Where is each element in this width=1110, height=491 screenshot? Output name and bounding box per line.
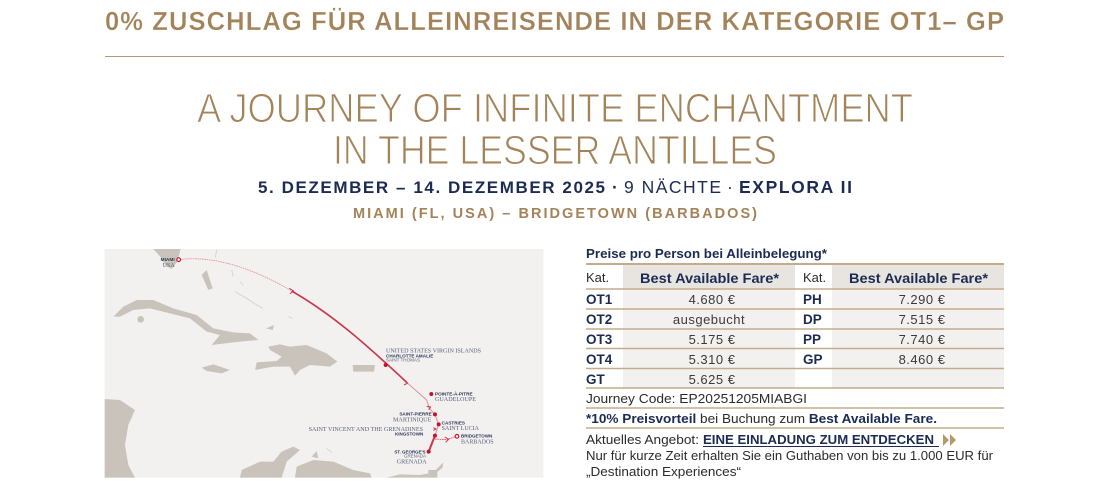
current offer: EINE EINLADUNG ZUM ENTDECKEN (703, 432, 934, 447)
table backgrounds (623, 265, 1004, 388)
map panel (105, 249, 543, 478)
fare rows: DP (803, 312, 822, 327)
map labels: BRIDGETOWN (461, 434, 492, 439)
fare rows: ausgebucht (673, 312, 745, 327)
port markers (177, 258, 459, 454)
fare rows (586, 292, 946, 387)
map labels: USA (163, 263, 175, 269)
table header row: Kat. (803, 270, 826, 285)
subtitle: dates, nights and ship: 5. DEZEMBER – 14. DEZEMBER 2025 (258, 178, 605, 197)
fare rows: GT (586, 372, 606, 387)
table header row (586, 270, 989, 286)
title (197, 85, 913, 173)
table header row: Kat. (586, 270, 609, 285)
current offer: „Destination Experiences“ (586, 464, 741, 479)
fare rows: 7.740 € (899, 332, 946, 347)
current offer: Nur für kurze Zeit erhalten Sie ein Guthaben von bis zu 1.000 EUR für (586, 448, 994, 463)
table header row: Best Available Fare* (640, 271, 780, 286)
fare rows: 5.625 € (689, 372, 736, 387)
fare rows: PH (803, 292, 822, 307)
fare rows: 8.460 € (899, 352, 946, 367)
fare rows: 7.515 € (899, 312, 946, 327)
map labels: GRENADA (404, 453, 426, 458)
table header row: Best Available Fare* (849, 271, 989, 286)
route line: Miami to Bridgetown: MIAMI (FL, USA) – BRIDGETOWN (BARBADOS) (353, 206, 757, 222)
map labels: POINTE-À-PITRE (435, 391, 473, 396)
map labels: BARBADOS (461, 439, 494, 445)
map labels: MIAMI (161, 257, 175, 262)
map labels: SAINT THOMAS (386, 358, 420, 363)
fare rows: OT2 (586, 312, 612, 327)
price table panel (586, 246, 1004, 479)
fare rows: GP (803, 352, 823, 367)
subtitle: dates, nights and ship (258, 177, 852, 197)
icon: double arrow (943, 434, 956, 446)
table heading: Preise pro Person bei Alleinbelegung* (586, 246, 828, 261)
subtitle: dates, nights and ship: · (727, 177, 733, 197)
map labels: UNITED STATES VIRGIN ISLANDS (386, 349, 481, 355)
map labels: SAINT LUCIA (442, 426, 480, 432)
fare rows: 5.175 € (689, 332, 736, 347)
subtitle: dates, nights and ship: 9 NÄCHTE (624, 177, 721, 197)
map labels: CHARLOTTE AMALIE (386, 353, 433, 358)
small islands (215, 250, 332, 452)
fare rows: 7.290 € (899, 292, 946, 307)
fare rows: OT1 (586, 292, 613, 307)
map labels: ST. GEORGE'S (394, 449, 426, 454)
fare rows: OT4 (586, 352, 613, 367)
map labels: SAINT-PIERRE (399, 412, 432, 417)
title: IN THE LESSER ANTILLES (333, 127, 777, 173)
current offer (586, 432, 994, 479)
map labels: KINGSTOWN (395, 432, 423, 437)
fare rows: OT3 (586, 332, 613, 347)
map labels (161, 257, 494, 466)
fare rows: 5.310 € (689, 352, 736, 367)
map labels: CASTRIES (442, 421, 465, 426)
subtitle: dates, nights and ship: EXPLORA II (739, 177, 852, 197)
map labels: GRENADA (397, 460, 427, 466)
journey code: Journey Code: EP20251205MIABGI (586, 391, 807, 406)
table rules (586, 264, 1004, 428)
map labels: GUADELOUPE (435, 397, 476, 403)
land masses (105, 249, 443, 478)
discount note: *10% Preisvorteil bei Buchung zum Best Available Fare. (586, 411, 937, 426)
fare rows: PP (803, 332, 821, 347)
top heading: 0% ZUSCHLAG FÜR ALLEINREISENDE IN DER KATEGORIE OT1– GP (105, 7, 1004, 36)
map labels: SAINT VINCENT AND THE GRENADINES (309, 427, 423, 433)
cruise route (179, 259, 457, 452)
current offer: Aktuelles Angebot: (586, 432, 699, 447)
subtitle: dates, nights and ship: · (612, 177, 618, 197)
title: A JOURNEY OF INFINITE ENCHANTMENT (197, 85, 913, 131)
fare rows: 4.680 € (689, 292, 736, 307)
map labels: MARTINIQUE (393, 418, 432, 424)
